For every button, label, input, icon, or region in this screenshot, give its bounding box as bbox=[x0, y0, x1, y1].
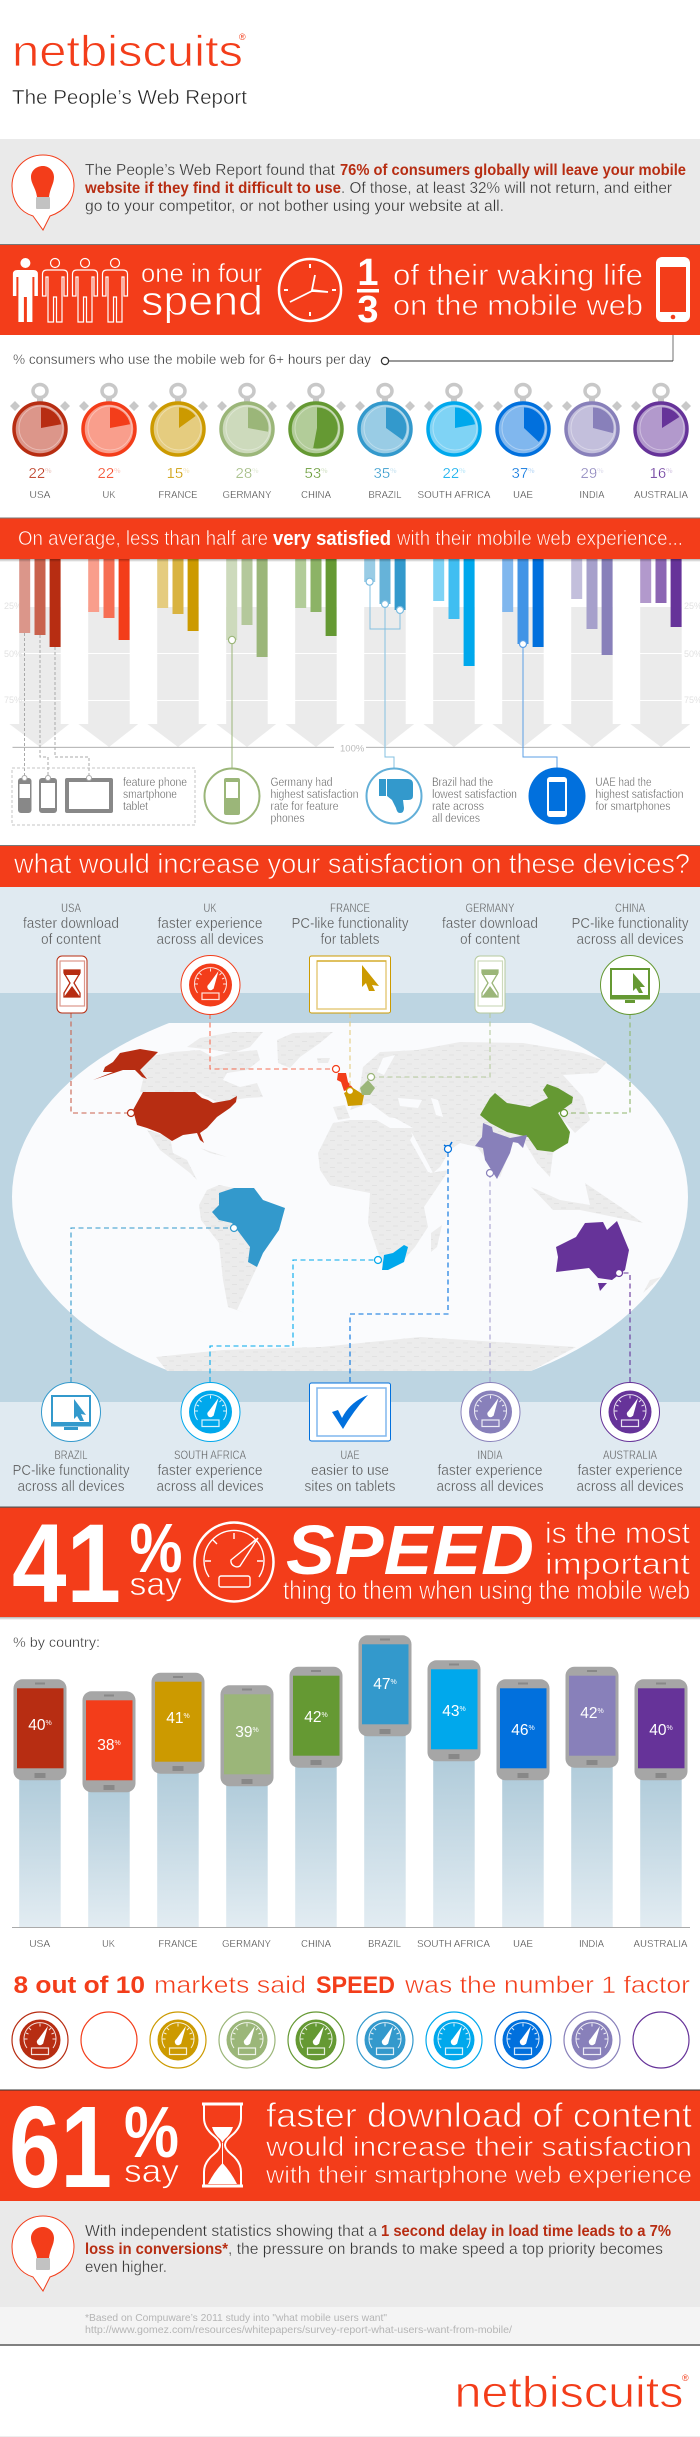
heading: percent consumers: % consumers who use the mobile web for 6+ hours per day bbox=[13, 351, 371, 367]
legend: devices: tablet bbox=[123, 801, 149, 813]
stopwatch: France: FRANCE bbox=[158, 489, 198, 501]
stopwatch: Australia bbox=[631, 384, 691, 501]
icon: hourglass bbox=[202, 2104, 243, 2186]
item: Australia faster experience: AUSTRALIA bbox=[603, 1448, 657, 1462]
scale labels: 100% bbox=[340, 744, 365, 754]
item: UAE easier to use: easier to use bbox=[311, 1462, 389, 1479]
text: 41% say: % bbox=[130, 1509, 182, 1587]
phone: India 42: INDIA bbox=[579, 1938, 604, 1950]
text block: intro: The People’s Web Report found that bbox=[85, 162, 336, 179]
phone: Brazil 47: BRAZIL bbox=[368, 1938, 401, 1950]
map pins bbox=[128, 1066, 622, 1276]
icon: light bulb callout bbox=[12, 155, 74, 230]
bars: Brazil bbox=[364, 559, 406, 610]
text: faster download: faster download of content bbox=[266, 2097, 693, 2135]
item: Australia faster experience: faster experience bbox=[578, 1462, 682, 1479]
scale labels: 50% bbox=[4, 649, 22, 659]
item: Germany faster download bbox=[442, 901, 538, 1013]
text: 41% say: say bbox=[130, 1566, 182, 1602]
item: USA faster download: of content bbox=[41, 931, 102, 948]
panel: world map section bbox=[0, 887, 700, 1507]
item: Australia faster experience bbox=[576, 1382, 684, 1495]
item: Brazil PC-like bbox=[12, 1382, 130, 1495]
bars: UK bbox=[88, 559, 130, 640]
banner: what would increase: what would increase your satisfaction on these devices? bbox=[13, 848, 690, 879]
stopwatch: UK: % bbox=[114, 468, 120, 475]
phone: India 42: % bbox=[598, 1708, 604, 1715]
phone: Germany 39: 39 bbox=[235, 1724, 253, 1741]
callout: Brazil lowest satisfaction: lowest satisfaction bbox=[432, 789, 517, 801]
phone: Australia 40: AUSTRALIA bbox=[634, 1938, 688, 1950]
callout: Brazil lowest satisfaction bbox=[366, 578, 517, 825]
stopwatch: UK: 22 bbox=[98, 465, 114, 482]
bars: China bbox=[295, 559, 337, 636]
legend: devices bbox=[12, 633, 195, 825]
item: USA faster download bbox=[23, 901, 119, 1013]
item: South Africa faster experience: SOUTH AFRICA bbox=[174, 1448, 246, 1462]
gauge: Germany bbox=[219, 2012, 275, 2068]
item: USA faster download: USA bbox=[61, 901, 81, 915]
stopwatch: China: 53 bbox=[305, 465, 321, 482]
phone: UAE 46 bbox=[496, 1679, 550, 1950]
phone: South Africa 43: 43 bbox=[442, 1703, 460, 1720]
phone: UK 38 bbox=[82, 1691, 136, 1950]
stopwatch: USA: % bbox=[45, 468, 51, 475]
land masses bbox=[140, 1032, 661, 1371]
scale labels: 75% bbox=[4, 695, 22, 705]
text: faster download: with their smartphone web experience bbox=[265, 2162, 692, 2189]
callout: Brazil lowest satisfaction: all devices bbox=[432, 813, 480, 825]
item: France PC-like: FRANCE bbox=[330, 901, 370, 915]
subtitle: The People’s Web Report bbox=[12, 87, 247, 109]
item: South Africa faster experience: faster experience bbox=[158, 1462, 262, 1479]
stopwatch: UK bbox=[79, 384, 139, 501]
stopwatch: USA: USA bbox=[30, 489, 50, 501]
gauge: UAE bbox=[495, 2012, 551, 2068]
phone: China 42: 42 bbox=[304, 1709, 322, 1726]
logo: footer netbiscuits: netbiscuits bbox=[454, 2368, 684, 2417]
item: UAE easier to use: UAE bbox=[340, 1448, 360, 1462]
text: of their waking life on the mobile web bbox=[393, 259, 643, 322]
heading: 8 out of 10 bbox=[14, 1972, 690, 1999]
phone: Brazil 47: 47 bbox=[373, 1676, 391, 1693]
text: one third: 1 bbox=[357, 252, 379, 294]
stopwatch: China: CHINA bbox=[301, 489, 331, 501]
item: France PC-like: PC-like functionality bbox=[292, 915, 409, 932]
callout: UAE smartphones: UAE had the bbox=[596, 777, 652, 789]
phone: Germany 39 bbox=[220, 1685, 274, 1950]
callout: Germany feature phones: phones bbox=[270, 813, 305, 825]
phone: China 42: % bbox=[322, 1712, 328, 1719]
text: one in four spend bbox=[141, 258, 263, 324]
countries highlighted bbox=[93, 1049, 629, 1291]
stopwatch: USA: 22 bbox=[29, 465, 45, 482]
callout: Germany feature phones: highest satisfaction bbox=[270, 789, 358, 801]
item: USA faster download: faster download bbox=[23, 915, 119, 932]
stopwatch: UAE: UAE bbox=[513, 489, 533, 501]
text block: intro bbox=[84, 162, 686, 215]
text block: closing: even higher. bbox=[85, 2259, 167, 2276]
phone: South Africa 43: % bbox=[460, 1706, 466, 1713]
stopwatch: UAE: 37 bbox=[512, 465, 528, 482]
phone: Germany 39: % bbox=[253, 1727, 259, 1734]
phone: USA 40: 40 bbox=[28, 1717, 46, 1734]
heading: 8 out of 10: markets said bbox=[154, 1972, 306, 1999]
item: UK faster experience: across all devices bbox=[156, 931, 264, 948]
text block: closing: With independent statistics showing that a bbox=[85, 2223, 377, 2240]
item: South Africa faster experience bbox=[156, 1382, 264, 1495]
phone: USA 40 bbox=[14, 1679, 66, 1950]
item: UK faster experience bbox=[156, 901, 264, 1014]
stopwatch: France: % bbox=[183, 468, 189, 475]
stopwatch: UK: UK bbox=[102, 489, 116, 501]
legend: devices: feature phone bbox=[123, 777, 187, 789]
text block: intro: 76% of consumers globally will leave your mobile bbox=[340, 162, 686, 179]
gauge: Brazil bbox=[357, 2012, 413, 2068]
phone: South Africa 43 bbox=[417, 1660, 490, 1950]
gauge: South Africa bbox=[426, 2012, 482, 2068]
phone: France 41: 41 bbox=[166, 1710, 184, 1727]
item: China PC-like: CHINA bbox=[615, 901, 645, 915]
stopwatch: South Africa: 22 bbox=[443, 465, 459, 482]
callout: Germany feature phones: rate for feature bbox=[270, 801, 338, 813]
heading: 8 out of 10: was the number 1 factor bbox=[404, 1972, 690, 1999]
scale labels bbox=[4, 601, 700, 754]
callout: UAE smartphones: for smartphones bbox=[596, 801, 671, 813]
stopwatch: Australia: 16 bbox=[650, 465, 666, 482]
arrows background bbox=[0, 607, 700, 747]
logo: netbiscuits: netbiscuits bbox=[12, 27, 243, 76]
stopwatch: USA bbox=[10, 384, 70, 501]
callout: Germany feature phones: Germany had bbox=[270, 777, 332, 789]
stopwatch: Brazil: BRAZIL bbox=[368, 489, 402, 501]
text block: closing bbox=[85, 2223, 671, 2276]
gauge: China bbox=[288, 2012, 344, 2068]
item: France PC-like bbox=[292, 901, 409, 1013]
banner: one in four bbox=[0, 244, 700, 335]
footnote: *Based on Compuware’s 2011 study into "what mobile users want" bbox=[85, 2312, 387, 2324]
phone: UAE 46: UAE bbox=[513, 1938, 533, 1950]
text: one third bbox=[357, 252, 379, 331]
phone: India 42: 42 bbox=[580, 1705, 598, 1722]
text: SPEED: SPEED bbox=[286, 1511, 534, 1589]
connector lines bbox=[71, 1013, 630, 1382]
phone: France 41: % bbox=[184, 1713, 190, 1720]
item: Brazil PC-like: BRAZIL bbox=[54, 1448, 88, 1462]
heading: by country: % by country: bbox=[13, 1634, 100, 1650]
stopwatch: Germany: GERMANY bbox=[222, 489, 272, 501]
item: India faster experience bbox=[436, 1382, 544, 1495]
text: 61% say: 61 bbox=[9, 2082, 112, 2212]
stopwatch: China bbox=[286, 384, 346, 501]
inland seas bbox=[377, 1055, 443, 1172]
phone: UAE 46: % bbox=[529, 1725, 535, 1732]
banner: very satisfied: very satisfied bbox=[273, 527, 391, 550]
item: Germany faster download: GERMANY bbox=[466, 901, 514, 915]
stopwatch: Australia: AUSTRALIA bbox=[634, 489, 688, 501]
text block: intro: go to your competitor, or not bother using your website at all. bbox=[85, 198, 504, 215]
connector: phone to stat line bbox=[381, 335, 673, 365]
heading: 8 out of 10: 8 out of 10 bbox=[14, 1972, 145, 1999]
icon: four people, one filled bbox=[13, 258, 127, 322]
item: China PC-like: across all devices bbox=[576, 931, 684, 948]
chart: stopwatches bbox=[10, 384, 691, 501]
phone: Australia 40: % bbox=[667, 1725, 673, 1732]
phone: Brazil 47 bbox=[358, 1635, 412, 1950]
item: France PC-like: for tablets bbox=[320, 931, 380, 948]
text: of their waking life on the mobile web: on the mobile web bbox=[393, 290, 643, 322]
text: 41% say: 41 bbox=[12, 1501, 121, 1626]
text block: closing: loss in conversions* bbox=[85, 2241, 229, 2258]
callout: UAE smartphones: highest satisfaction bbox=[596, 789, 684, 801]
banner: 61% say bbox=[0, 2082, 700, 2212]
stopwatch: China: % bbox=[321, 468, 327, 475]
phone: UK 38: UK bbox=[102, 1938, 115, 1950]
item: Brazil PC-like: across all devices bbox=[18, 1478, 124, 1495]
item: India faster experience: faster experience bbox=[438, 1462, 542, 1479]
stopwatch: India: INDIA bbox=[580, 489, 604, 501]
item: Germany faster download: of content bbox=[460, 931, 521, 948]
item: South Africa faster experience: across all devices bbox=[156, 1478, 264, 1495]
phone: France 41: FRANCE bbox=[158, 1938, 198, 1950]
item: India faster experience: INDIA bbox=[478, 1448, 502, 1462]
gauge: USA bbox=[12, 2012, 68, 2068]
stopwatch: India: % bbox=[597, 468, 603, 475]
bars: Australia bbox=[640, 559, 682, 627]
callout: Germany feature phones bbox=[204, 636, 358, 825]
text: is the most important: is the most bbox=[545, 1517, 691, 1550]
callout: Brazil lowest satisfaction: Brazil had the bbox=[432, 777, 493, 789]
item: Australia faster experience: across all devices bbox=[576, 1478, 684, 1495]
item: Brazil PC-like: PC-like functionality bbox=[12, 1462, 130, 1479]
text block: closing: 1 second delay in load time leads to a 7% bbox=[381, 2223, 671, 2240]
text block: intro: website if they find it difficult to use bbox=[84, 180, 341, 197]
phone: UAE 46: 46 bbox=[511, 1722, 529, 1739]
stopwatch: France: 15 bbox=[167, 465, 183, 482]
gauge: India bbox=[564, 2012, 620, 2068]
phone: India 42 bbox=[566, 1667, 618, 1950]
stopwatch: UAE bbox=[493, 384, 553, 501]
phone: China 42: CHINA bbox=[301, 1938, 331, 1950]
chart: phones by country bbox=[12, 1635, 690, 1950]
stopwatch: Brazil: 35 bbox=[374, 465, 390, 482]
stopwatch: Germany: % bbox=[252, 468, 258, 475]
stopwatch: Germany: 28 bbox=[236, 465, 252, 482]
gauge: France bbox=[150, 2012, 206, 2068]
phone: Australia 40 bbox=[634, 1679, 688, 1950]
icon: speedometer bbox=[194, 1522, 274, 1602]
logo: footer netbiscuits: ® bbox=[682, 2373, 689, 2383]
stopwatch: Brazil bbox=[355, 384, 415, 501]
footnote bbox=[0, 2307, 700, 2346]
item: Germany faster download: faster download bbox=[442, 915, 538, 932]
bars: India bbox=[571, 559, 613, 655]
phone: USA 40: % bbox=[46, 1720, 52, 1727]
item: China PC-like bbox=[572, 901, 689, 1014]
text: faster download bbox=[265, 2097, 693, 2189]
banner: 41% say speed bbox=[0, 1501, 700, 1626]
stopwatch: South Africa bbox=[418, 384, 490, 501]
text: is the most important bbox=[283, 1517, 691, 1605]
bars: UAE bbox=[502, 559, 544, 647]
item: China PC-like: PC-like functionality bbox=[572, 915, 689, 932]
gauge: UK empty bbox=[81, 2012, 137, 2068]
phone: UK 38: % bbox=[115, 1740, 121, 1747]
item: UK faster experience: UK bbox=[204, 901, 216, 915]
text: 61% say: say bbox=[124, 2153, 179, 2189]
gauge: Australia empty bbox=[633, 2012, 689, 2068]
stopwatch: India: 29 bbox=[581, 465, 597, 482]
text: of their waking life on the mobile web: of their waking life bbox=[393, 259, 643, 292]
item: UAE easier to use bbox=[304, 1383, 396, 1495]
stopwatch: Brazil: % bbox=[390, 468, 396, 475]
text: faster download: would increase their satisfaction bbox=[265, 2131, 692, 2162]
phone: USA 40: USA bbox=[29, 1938, 50, 1950]
panel: closing statement bbox=[0, 2201, 700, 2307]
stopwatch: Australia: % bbox=[666, 468, 672, 475]
bars: Germany bbox=[226, 559, 268, 657]
phone: South Africa 43: SOUTH AFRICA bbox=[417, 1938, 490, 1950]
callout: UAE smartphones bbox=[520, 640, 684, 824]
heading: 8 out of 10: SPEED bbox=[316, 1972, 395, 1999]
text: is the most important: important bbox=[545, 1548, 691, 1581]
icon: light bulb callout bbox=[12, 2216, 74, 2291]
stopwatch: South Africa: % bbox=[459, 468, 465, 475]
item: UAE easier to use: sites on tablets bbox=[304, 1478, 396, 1495]
stopwatch: Germany bbox=[217, 384, 277, 501]
text: one third: 3 bbox=[357, 289, 379, 331]
stopwatch: France bbox=[148, 384, 208, 501]
item: India faster experience: across all devices bbox=[436, 1478, 544, 1495]
phone: Germany 39: GERMANY bbox=[222, 1938, 271, 1950]
bars: South Africa bbox=[433, 559, 475, 666]
text block: closing: , the pressure on brands to make speed a top priority becomes bbox=[228, 2241, 663, 2258]
map globe bbox=[12, 1023, 688, 1371]
banner: very satisfied bbox=[0, 518, 700, 562]
logo: netbiscuits: ® bbox=[239, 32, 246, 42]
axis bbox=[12, 1927, 690, 1928]
item: UK faster experience: faster experience bbox=[158, 915, 262, 932]
stopwatch: UAE: % bbox=[528, 468, 534, 475]
gauges row bbox=[12, 2012, 689, 2068]
icon: clock bbox=[279, 259, 341, 321]
phone: China 42 bbox=[290, 1667, 342, 1950]
phone: Brazil 47: % bbox=[391, 1679, 397, 1686]
phone: UK 38: 38 bbox=[97, 1737, 115, 1754]
chart: satisfaction bars bbox=[0, 559, 700, 754]
footnote: http://www.gomez.com/resources/whitepapers/survey-report-what-users-want-from-mobile/ bbox=[85, 2324, 512, 2336]
scale labels: 25% bbox=[4, 601, 22, 611]
text block: intro: . Of those, at least 32% will not return, and either bbox=[341, 180, 672, 197]
phone: Australia 40: 40 bbox=[649, 1722, 667, 1739]
banner: very satisfied: On average, less than half are bbox=[18, 527, 268, 550]
phone: France 41 bbox=[152, 1673, 204, 1950]
text: 61% say: % bbox=[124, 2093, 179, 2173]
text: one in four spend: one in four bbox=[141, 258, 262, 288]
stopwatch: South Africa: SOUTH AFRICA bbox=[418, 489, 490, 501]
text: one in four spend: spend bbox=[141, 277, 263, 324]
bars: USA bbox=[19, 559, 61, 647]
icon: smartphone bbox=[656, 257, 690, 322]
callout: Brazil lowest satisfaction: rate across bbox=[432, 801, 484, 813]
panel: intro statement bbox=[0, 139, 700, 244]
stopwatch: India bbox=[562, 384, 622, 501]
legend: devices: smartphone bbox=[123, 789, 177, 801]
bars: France bbox=[157, 559, 199, 631]
